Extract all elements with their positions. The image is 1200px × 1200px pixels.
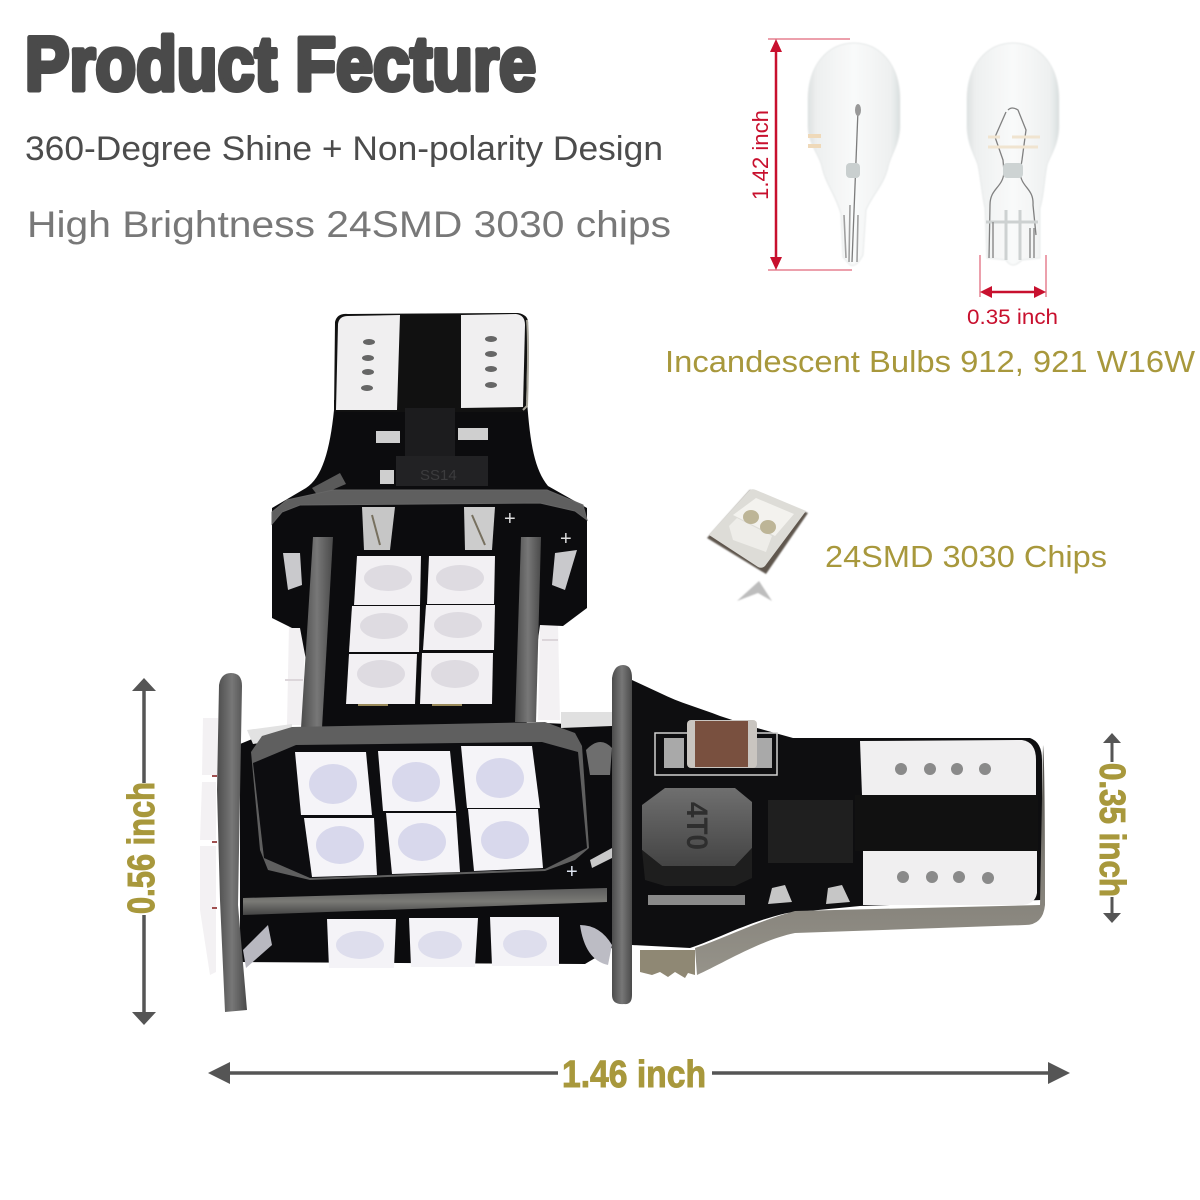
solder tabs (362, 507, 572, 550)
chip row 1 (354, 556, 495, 605)
LED chip grid of bottom bulb (295, 746, 543, 877)
solder joints (243, 742, 612, 968)
icon: front-view incandescent bulb (967, 43, 1059, 265)
left disc (217, 673, 247, 1012)
blade PCB neck (272, 400, 587, 735)
right disc (612, 665, 632, 1004)
side chips of top bulb (285, 575, 560, 725)
LED-board plate (251, 722, 589, 880)
board behind chips (240, 723, 612, 964)
horizontal rail (243, 888, 607, 915)
dimension: 1.46 inch: 1.46 inch (562, 1054, 706, 1096)
icon: side-view incandescent bulb (808, 43, 900, 266)
top plate (272, 490, 587, 524)
icon: SMD 3030 chip (707, 489, 808, 601)
inductor (642, 788, 752, 905)
dimension: bulb height (748, 39, 852, 270)
contact centre strip (855, 795, 1038, 851)
subtitle: shine and polarity: 360-Degree Shine + Non-polarity Design (25, 130, 663, 168)
cross rails (247, 712, 612, 744)
serrated edge (640, 950, 695, 978)
caption: incandescent bulbs: Incandescent Bulbs 912, 921 W16W (665, 344, 1196, 379)
title: Product Fecture (25, 22, 536, 107)
caption: chip: 24SMD 3030 Chips (825, 539, 1107, 574)
capacitor (655, 720, 777, 775)
solder tabs: + (504, 508, 516, 530)
solder tabs: + (560, 528, 572, 550)
dimension: base width (967, 255, 1058, 329)
dimension: 0.56 inch: 0.56 inch (121, 782, 163, 914)
chip row bottom (304, 809, 543, 877)
driver contact pads (860, 740, 1037, 905)
panel: incandescent bulb comparison (665, 39, 1196, 379)
dimension: bulb height: 1.42 inch (748, 110, 773, 200)
lower chip row (327, 917, 559, 968)
LED chip grid of top bulb (346, 556, 495, 705)
chip row 3 (346, 653, 493, 705)
side chips of bottom bulb (200, 718, 218, 975)
side rails of top bulb (283, 537, 577, 728)
dimension: 1.46 inch (208, 1054, 1070, 1096)
dimension: 0.56 inch (121, 678, 163, 1025)
panel: top LED bulb (272, 313, 587, 735)
panel: 3030 chip callout (707, 489, 1107, 601)
solder joints: + (566, 861, 578, 883)
chip row 2 (349, 605, 495, 652)
transistor (768, 800, 853, 904)
inductor: 4T0 (680, 802, 713, 850)
rectifier SS14 and solder pads (312, 408, 488, 500)
blade contact pads (334, 313, 528, 412)
subtitle: brightness: High Brightness 24SMD 3030 chips (27, 204, 671, 245)
dimension: 0.35 inch: 0.35 inch (1092, 763, 1133, 897)
rectifier SS14 and solder pads: SS14 (420, 467, 457, 484)
dimension: base width: 0.35 inch (967, 306, 1058, 329)
chip row top (295, 746, 540, 815)
driver PCB edge (695, 745, 1045, 975)
driver PCB (632, 680, 1045, 978)
panel: bottom LED bulb (200, 665, 1045, 1012)
